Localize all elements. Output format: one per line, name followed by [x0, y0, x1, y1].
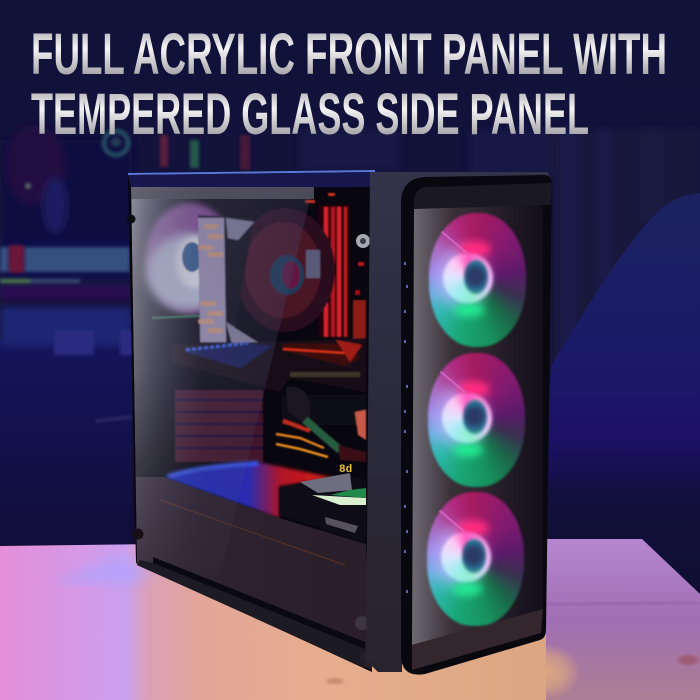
LED vent column — [404, 262, 408, 593]
acrylic lower band — [412, 609, 543, 670]
glass haze reflection — [131, 187, 314, 590]
front fan 2 — [426, 352, 526, 488]
bottom fan — [279, 473, 366, 533]
acrylic panel — [412, 205, 543, 645]
ring 1 — [443, 253, 493, 303]
magenta spot 1 — [459, 241, 491, 257]
cooler fan — [235, 208, 335, 332]
bottom plate — [137, 560, 365, 668]
front fan 3 — [425, 490, 525, 628]
hub 2 — [463, 400, 487, 434]
screw bottom corner — [360, 652, 370, 662]
glow 1 — [436, 247, 488, 309]
ring 2 — [442, 393, 492, 443]
green spot 1 — [454, 303, 484, 317]
PSU shroud — [131, 477, 372, 672]
front fan 1 — [427, 212, 527, 348]
blade streak 1 — [441, 231, 467, 253]
blade streak 2 — [440, 371, 466, 393]
front bezel side — [366, 172, 552, 672]
side panel body — [126, 170, 375, 672]
chair — [540, 193, 700, 600]
RAM sticks — [318, 205, 366, 340]
magenta spot 2 — [458, 381, 490, 397]
blade streak 3 — [439, 510, 465, 532]
front frame — [401, 175, 552, 675]
hub 1 — [464, 260, 488, 294]
curtain stripes on right wall — [300, 130, 700, 370]
blade disc 1 — [429, 213, 526, 347]
top strip — [414, 183, 552, 209]
glow 3 — [434, 526, 486, 588]
green spot 3 — [452, 582, 482, 596]
blurred monitor and desk on left — [0, 125, 250, 545]
diagnostic display: 8d — [339, 464, 352, 476]
magenta spot 3 — [457, 520, 489, 536]
motherboard red dots — [305, 193, 364, 295]
green spot 2 — [453, 443, 483, 457]
glow 2 — [435, 387, 487, 449]
screw top left — [126, 214, 136, 224]
screw bottom left — [132, 528, 144, 540]
blade disc 3 — [427, 492, 524, 626]
table — [0, 539, 700, 700]
hub 3 — [462, 539, 486, 573]
graphics card — [172, 338, 366, 392]
reflective floor — [163, 462, 335, 518]
screw top right — [356, 234, 370, 248]
wall — [0, 0, 700, 560]
ring 3 — [441, 532, 491, 582]
rear exhaust fan — [146, 203, 234, 318]
lower motherboard — [175, 387, 366, 462]
screw bottom right — [355, 616, 369, 630]
PC case — [126, 170, 552, 675]
CPU heatsink — [198, 215, 258, 345]
blade disc 2 — [428, 353, 525, 487]
